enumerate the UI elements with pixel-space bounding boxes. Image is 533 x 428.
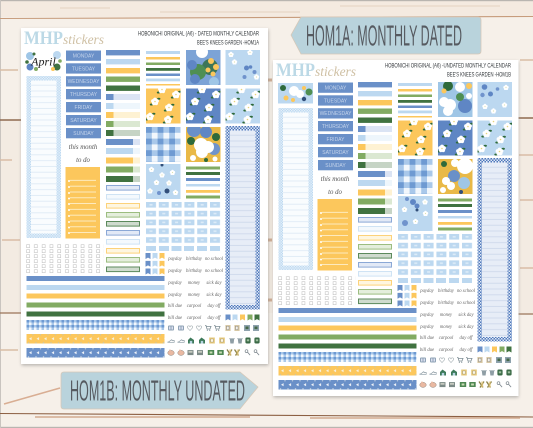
weekday labels: TUESDAY: [324, 98, 348, 104]
floral square: blue and white ditsy: [478, 82, 512, 117]
event script labels: birthday: [438, 289, 455, 294]
event script labels: sick day: [206, 293, 223, 298]
floral square: yellow with blue: [438, 158, 473, 194]
this month and to do script: this month: [321, 176, 350, 183]
event script labels: money: [188, 281, 201, 286]
floral square: yellow with large white flower: [186, 127, 220, 162]
floral square: light blue with white blossoms: [146, 164, 180, 199]
this month and to do script: [321, 176, 350, 196]
event script labels: day off: [208, 304, 221, 309]
weekday labels: SUNDAY: [73, 131, 94, 137]
logo: [276, 60, 357, 81]
sheet shadow: HOM1B: [274, 62, 518, 398]
event script labels: day off: [208, 316, 221, 321]
event script labels: no school: [205, 269, 224, 274]
weekday labels: THURSDAY: [322, 124, 350, 130]
event script labels: bill due: [420, 336, 434, 341]
sheet title: BEE'S KNEES GARDEN -HOM1A: [197, 40, 260, 46]
event script labels: no school: [457, 289, 476, 294]
event script labels: birthday: [186, 269, 203, 274]
logo: MHP: [276, 60, 315, 81]
this month and to do script: [69, 144, 98, 164]
weekday labels: SATURDAY: [322, 150, 349, 156]
event script labels: payday: [419, 313, 435, 318]
event script labels: payday: [419, 325, 435, 330]
weekday labels: WEDNESDAY: [68, 79, 100, 85]
event script labels: carpool: [439, 336, 454, 341]
floral square: light blue ditsy: [226, 50, 260, 85]
arrow tag: HOM1A monthly dated: [291, 17, 481, 54]
event script labels: birthday: [438, 301, 455, 306]
event script labels: [419, 289, 476, 353]
floral square: blue flowers on light blue: [398, 196, 432, 231]
event script labels: sick day: [458, 325, 475, 330]
event script labels: payday: [167, 281, 183, 286]
event script labels: money: [440, 325, 453, 330]
weekday labels: [320, 86, 352, 169]
sticker sheet: HOM1B undated: [273, 60, 518, 396]
event script labels: no school: [205, 257, 224, 262]
event script labels: no school: [457, 301, 476, 306]
event script labels: bill due: [168, 304, 182, 309]
arrow tag: HOM1B monthly undated: [61, 372, 258, 409]
event script labels: [167, 257, 224, 321]
weekday labels: FRIDAY: [75, 105, 93, 111]
weekday labels: SATURDAY: [70, 118, 97, 124]
event script labels: bill due: [420, 348, 434, 353]
event script labels: payday: [419, 289, 435, 294]
sheet title: [138, 30, 260, 46]
weekday labels: TUESDAY: [72, 66, 96, 72]
event script labels: day off: [460, 336, 473, 341]
weekday labels: THURSDAY: [70, 92, 98, 98]
event script labels: carpool: [187, 316, 202, 321]
logo: stickers: [315, 65, 357, 80]
event script labels: carpool: [187, 304, 202, 309]
event script labels: payday: [167, 257, 183, 262]
sticker sheet: HOM1A dated: [21, 28, 268, 364]
event script labels: bill due: [168, 316, 182, 321]
event script labels: payday: [167, 293, 183, 298]
this month and to do script: to do: [328, 189, 342, 196]
weekday labels: WEDNESDAY: [320, 111, 352, 117]
event script labels: carpool: [439, 348, 454, 353]
event script labels: payday: [419, 301, 435, 306]
event script labels: sick day: [206, 281, 223, 286]
weekday labels: MONDAY: [73, 54, 95, 60]
weekday labels: FRIDAY: [327, 137, 345, 143]
sheet shadow: HOM1A: [22, 30, 268, 366]
weekday labels: MONDAY: [325, 86, 347, 92]
text: HOM1B: MONTHLY UNDATED: [70, 376, 245, 408]
event script labels: money: [188, 293, 201, 298]
event script labels: sick day: [458, 313, 475, 318]
event script labels: day off: [460, 348, 473, 353]
this month and to do script: this month: [69, 144, 98, 151]
weekday labels: [68, 54, 100, 137]
weekday labels: SUNDAY: [325, 163, 346, 169]
event script labels: money: [440, 313, 453, 318]
April header sticker: April: [30, 54, 56, 68]
floral square: blue and yellow: [186, 50, 220, 85]
event script labels: payday: [167, 269, 183, 274]
April header sticker: [25, 51, 62, 72]
sheet title: HOBONICHI ORIGINAL (A6) - DATED MONTHLY CALENDAR: [138, 30, 259, 38]
sheet title: [385, 62, 511, 78]
logo: MHP: [24, 28, 63, 49]
event script labels: birthday: [186, 257, 203, 262]
floral header sticker: [278, 83, 313, 104]
logo: [24, 28, 105, 49]
this month and to do script: to do: [76, 157, 90, 164]
logo: stickers: [63, 33, 105, 48]
floral square: white and blue: [438, 81, 472, 117]
